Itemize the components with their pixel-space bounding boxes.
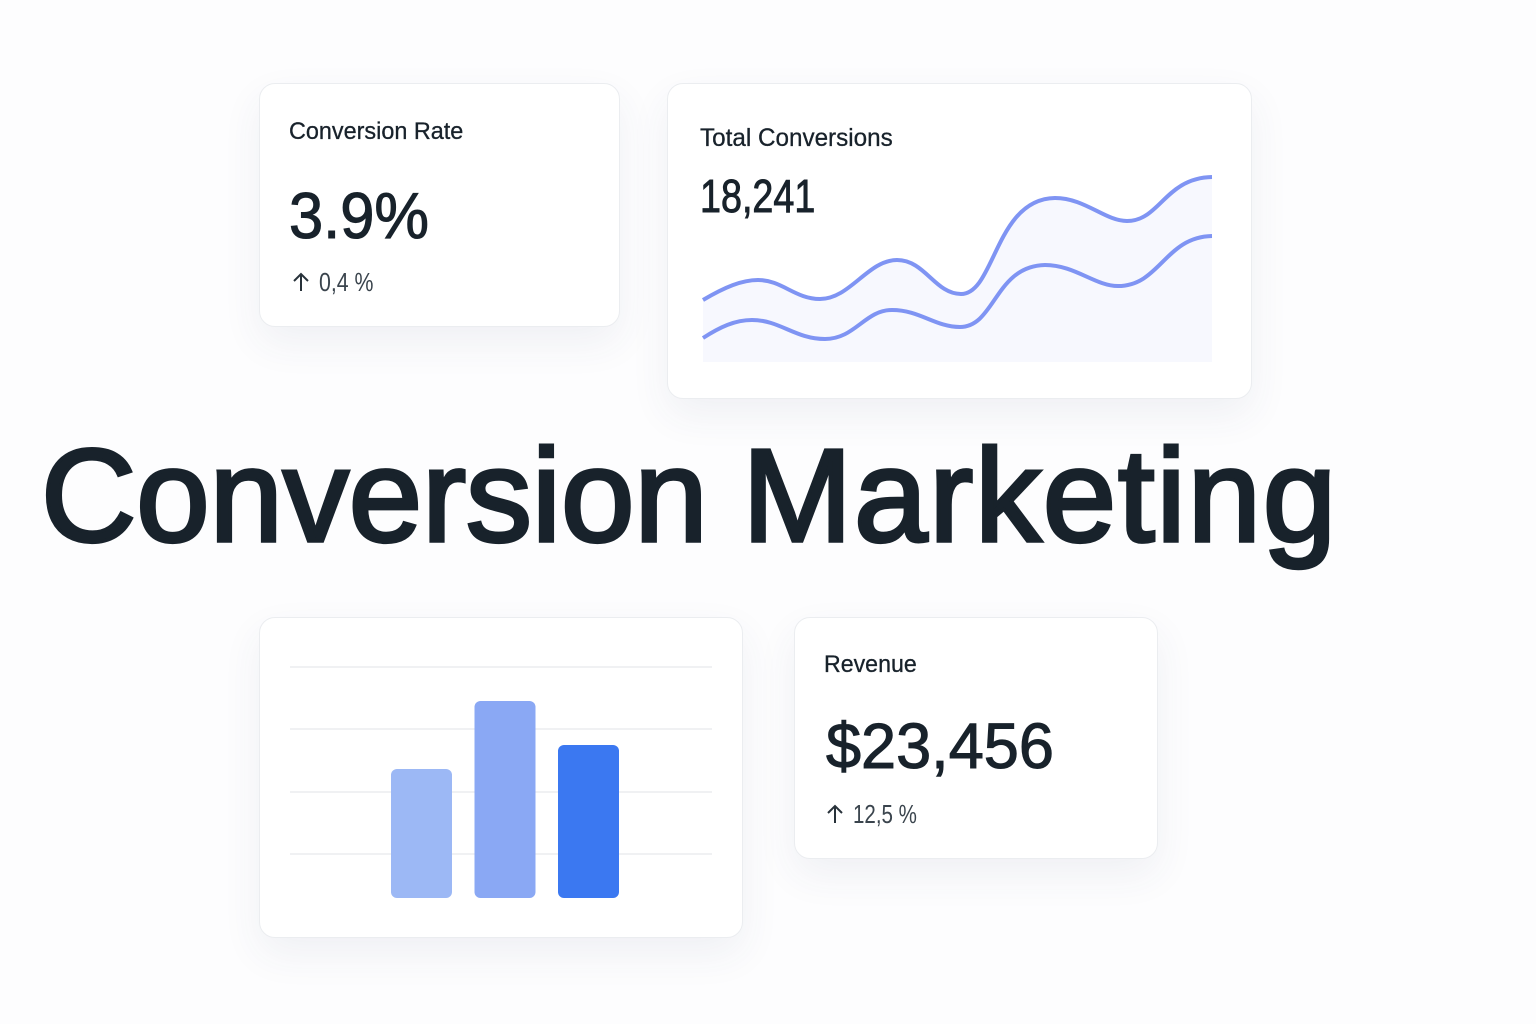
panel: bar chart xyxy=(259,617,743,938)
change: revenue: 12,5 % xyxy=(853,799,917,829)
bar chart xyxy=(290,666,712,898)
panel: conversion rate xyxy=(259,83,620,327)
change: conversion rate xyxy=(293,267,374,297)
value: conversion rate: 3.9% xyxy=(289,179,429,252)
label: total conversions: Total Conversions xyxy=(700,124,893,152)
panel: total conversions xyxy=(667,83,1252,399)
value: total conversions: 18,241 xyxy=(700,170,815,222)
title: Conversion Marketing xyxy=(41,422,1338,569)
value: revenue: $23,456 xyxy=(826,710,1054,782)
change: conversion rate: 0,4 % xyxy=(319,267,374,297)
line chart xyxy=(702,175,1212,341)
panel: revenue xyxy=(794,617,1158,859)
label: revenue: Revenue xyxy=(824,651,917,678)
label: conversion rate: Conversion Rate xyxy=(289,118,463,145)
